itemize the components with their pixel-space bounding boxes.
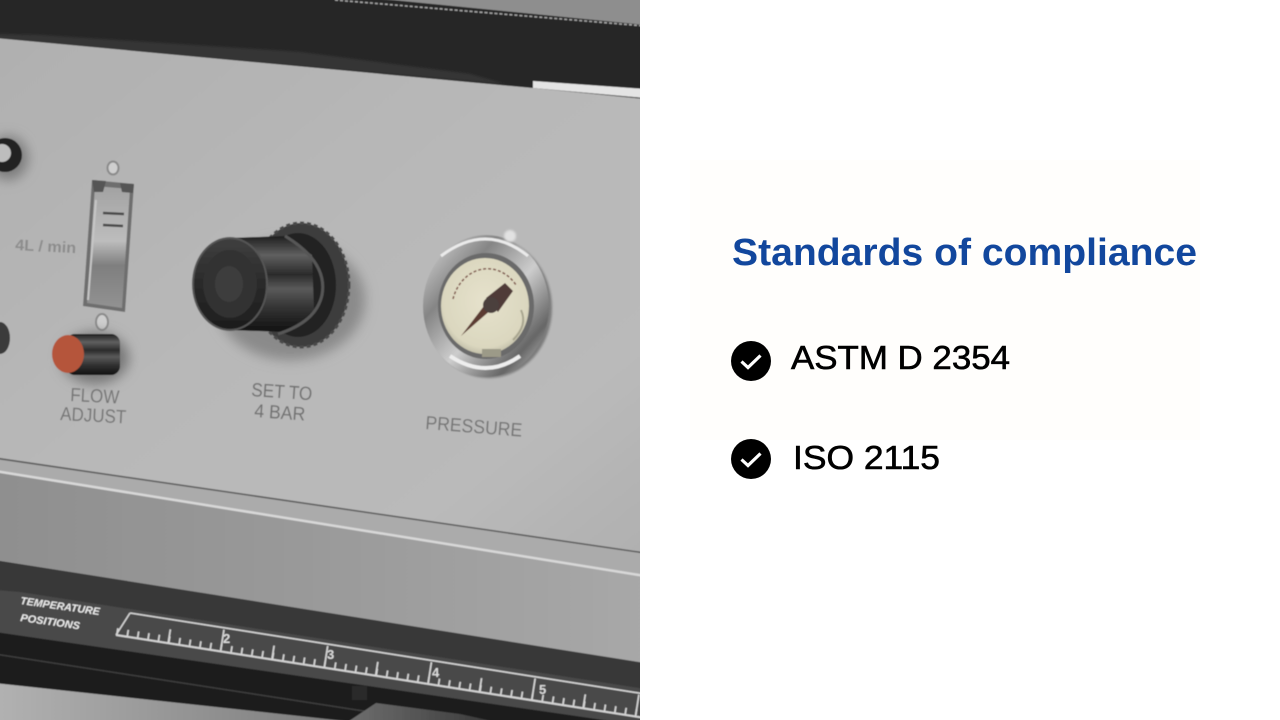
light surface bottom-centre [349,702,488,720]
ruler scale: 2 [223,631,230,646]
flow meter window [83,180,134,312]
steel front panel [0,38,645,553]
list item: ISO 2115: ISO 2115 [793,439,940,476]
list item: ASTM D 2354: ASTM D 2354 [791,339,1010,376]
temperature label: POSITIONS [20,612,81,632]
light surface bottom-left [0,683,355,720]
photo: instrument control panel [0,0,651,720]
list item: ISO 2115 [731,439,940,479]
panel label: flow adjust: ADJUST [60,404,127,428]
ruler scale [116,613,651,718]
panel label: set to 4 bar: 4 BAR [254,401,306,426]
list item: ASTM D 2354 [731,339,1010,381]
flow adjust knob [52,332,129,384]
icon: check circle [731,341,771,381]
white reflective strip [533,81,645,98]
ruler scale: 3 [327,647,334,662]
panel label: flow adjust [60,388,126,424]
panel label: flow adjust: FLOW [70,385,120,409]
regulator knob [193,223,365,360]
temperature label: TEMPERATURE [20,595,101,618]
left edge knobs [0,136,28,354]
black ridges below the ruler [0,630,645,720]
panel label: pressure: PRESSURE [425,413,523,442]
icon: check circle [731,439,771,479]
dark upper housing [0,0,640,100]
ruler scale: 4 [432,665,440,680]
panel label: 4L / min: 4L / min [15,237,77,257]
temperature label [20,595,101,632]
bolt on base [352,686,367,700]
panel label: set to 4 bar [252,382,312,421]
dark base band [0,560,640,689]
ruler plate [0,590,645,720]
panel label: set to 4 bar: SET TO [251,380,313,405]
flow meter screws [96,162,118,330]
lower lip of the panel [0,458,645,664]
ruler scale: 5 [539,682,546,697]
faint content background [690,160,1200,440]
pressure gauge [423,230,552,378]
heading: Standards of compliance [732,232,1197,274]
